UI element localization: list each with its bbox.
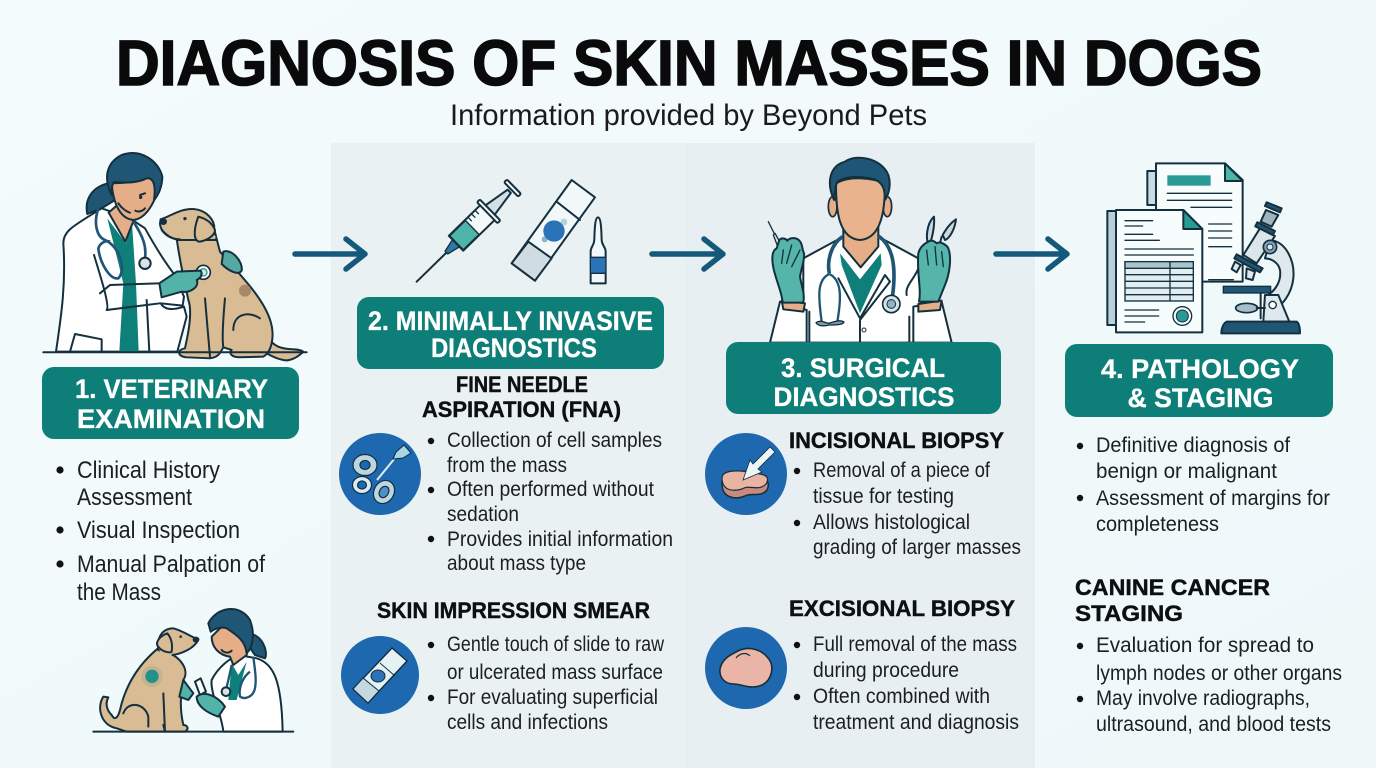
list: canine cancer staging: Evaluation for spread to (1096, 633, 1314, 657)
panel: step 3 background (686, 143, 1035, 768)
icon: dog with mass (159, 209, 303, 360)
badge: step 3: 3. SURGICAL (781, 353, 945, 383)
heading: canine cancer staging: CANINE CANCER (1075, 575, 1270, 600)
list: incisional biopsy: tissue for testing (813, 484, 954, 508)
badge: step 4: 4. PATHOLOGY (1101, 354, 1299, 384)
list: fine needle aspiration: Often performed without (447, 477, 654, 501)
list: veterinary examination: Manual Palpation of (77, 551, 265, 578)
icon: back report (1147, 163, 1243, 282)
heading: excisional biopsy: EXCISIONAL BIOPSY (789, 596, 1015, 621)
list: excisional biopsy: Often combined with (813, 684, 990, 708)
heading: canine cancer staging: STAGING (1075, 601, 1183, 626)
badge: step 4: & STAGING (1128, 383, 1274, 413)
icon: cells and needle (339, 433, 421, 515)
icon: excised mass (705, 627, 787, 709)
list: pathology (1077, 433, 1330, 536)
badge: step 4 (1065, 344, 1333, 417)
list: skin impression smear: For evaluating superficial (447, 685, 658, 709)
list: skin impression smear (428, 632, 664, 734)
list: incisional biopsy (794, 458, 1021, 559)
list: excisional biopsy: treatment and diagnosis (813, 710, 1019, 734)
icon: microscope (1221, 202, 1300, 333)
list: pathology: benign or malignant (1096, 459, 1277, 483)
illustration: syringe, slide and ampoule (406, 176, 606, 292)
subtitle: Information provided by Beyond Pets (450, 99, 927, 132)
badge: step 1: 1. VETERINARY (75, 374, 268, 404)
list: veterinary examination: Clinical History (77, 457, 221, 484)
list: pathology: Definitive diagnosis of (1096, 433, 1290, 457)
heading: fine needle aspiration: ASPIRATION (FNA) (422, 397, 621, 422)
list: fine needle aspiration: sedation (447, 502, 519, 526)
list: fine needle aspiration: Provides initial information (447, 527, 673, 551)
badge: step 1 (42, 367, 299, 439)
icon: syringe (406, 176, 524, 292)
panel: step 2 background (331, 143, 687, 768)
list: skin impression smear: Gentle touch of slide to raw (447, 632, 664, 656)
list: veterinary examination (56, 457, 265, 606)
illustration: veterinarian taking sample from dog (93, 609, 293, 732)
illustration: surgeon with instruments (768, 158, 956, 343)
heading: fine needle aspiration (422, 372, 621, 422)
list: fine needle aspiration: about mass type (447, 551, 586, 575)
list: canine cancer staging: lymph nodes or other organs (1096, 661, 1342, 685)
list: incisional biopsy: Allows histological (813, 510, 970, 534)
list: skin impression smear: cells and infections (447, 710, 608, 734)
list: veterinary examination: Assessment (77, 484, 192, 511)
list: excisional biopsy: Full removal of the mass (813, 632, 1017, 656)
list: incisional biopsy: grading of larger masses (813, 535, 1021, 559)
arrow: step 3 to 4 (996, 239, 1067, 269)
arrow: step 1 to 2 (295, 239, 365, 269)
list: incisional biopsy: Removal of a piece of (813, 458, 990, 482)
icon: ampoule (591, 217, 606, 283)
icon: slide with smear (341, 636, 419, 714)
list: canine cancer staging (1077, 633, 1342, 736)
badge: step 3: DIAGNOSTICS (774, 382, 954, 412)
badge: step 1: EXAMINATION (77, 404, 265, 434)
icon: microscope slide (512, 180, 595, 281)
illustration: veterinarian examining dog (43, 153, 307, 360)
icon: front report (1107, 210, 1202, 332)
list: fine needle aspiration: Collection of cell samples (447, 428, 662, 452)
icon: incisional biopsy tissue (705, 433, 787, 515)
list: veterinary examination: Visual Inspection (77, 517, 240, 544)
heading: fine needle aspiration: FINE NEEDLE (456, 372, 588, 397)
badge: step 2: 2. MINIMALLY INVASIVE (368, 306, 653, 336)
heading: skin impression smear: SKIN IMPRESSION SMEAR (377, 598, 650, 623)
list: canine cancer staging: May involve radiographs, (1096, 686, 1310, 710)
list: canine cancer staging: ultrasound, and blood tests (1096, 712, 1331, 736)
list: excisional biopsy: during procedure (813, 658, 959, 682)
list: fine needle aspiration (428, 428, 673, 575)
list: skin impression smear: or ulcerated mass surface (447, 660, 663, 684)
list: fine needle aspiration: from the mass (447, 453, 567, 477)
badge: step 3 (726, 342, 1001, 414)
badge: step 2: DIAGNOSTICS (431, 333, 597, 363)
list: pathology: completeness (1096, 512, 1219, 536)
title: DIAGNOSIS OF SKIN MASSES IN DOGS (116, 27, 1262, 99)
badge: step 2 (357, 297, 664, 369)
arrow: step 2 to 3 (652, 239, 723, 269)
heading: incisional biopsy: INCISIONAL BIOPSY (789, 428, 1004, 453)
list: excisional biopsy (794, 632, 1019, 734)
illustration: pathology reports and microscope (1107, 163, 1300, 333)
heading: canine cancer staging (1075, 575, 1270, 626)
list: pathology: Assessment of margins for (1096, 486, 1330, 510)
list: veterinary examination: the Mass (77, 579, 161, 606)
